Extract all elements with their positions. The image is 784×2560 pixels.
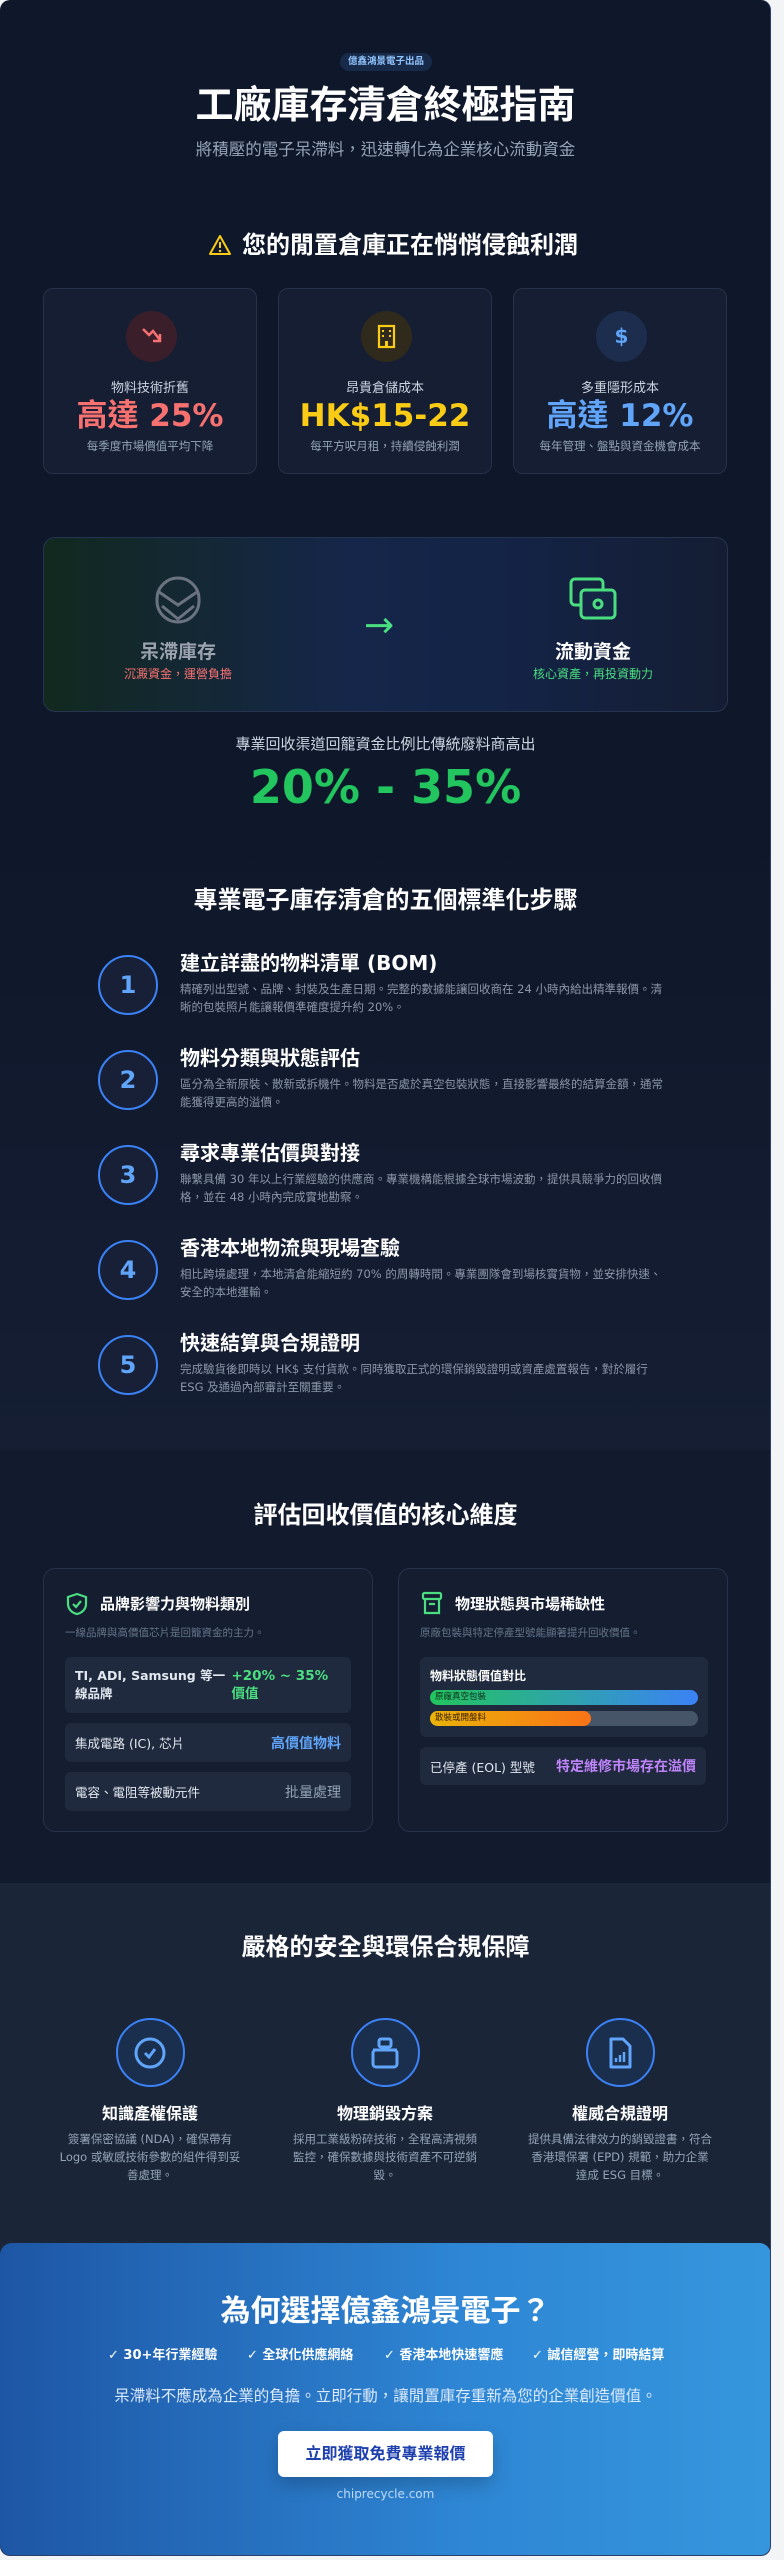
stat card: storage cost: 昂貴倉儲成本 <box>346 381 424 396</box>
step 2: 區分為全新原裝、散新或拆機件。物料是否處於真空包裝狀態，直接影響最終的結算金額，通常能獲得更高的溢價。 <box>180 1077 663 1109</box>
row: top brands: +20% ~ 35% 價值 <box>231 1668 328 1702</box>
transform panel <box>43 537 728 712</box>
steps section background <box>0 830 771 1450</box>
icon: cash <box>570 578 616 620</box>
stat callout: 專業回收渠道回籠資金比例比傳統廢料商高出 <box>235 735 536 753</box>
row: IC: 集成電路 (IC), 芯片 <box>75 1736 184 1751</box>
panel: physical state <box>398 1568 728 1832</box>
transform panel: 沉澱資金，運營負擔 <box>124 667 232 681</box>
compliance heading: 嚴格的安全與環保合規保障 <box>242 1933 530 1961</box>
row: IC: 高價值物料 <box>271 1736 341 1752</box>
step 4: 4 <box>120 1256 136 1284</box>
row: EOL: 已停產 (EOL) 型號 <box>430 1760 535 1774</box>
button: 立即獲取免費專業報價 <box>305 2444 466 2463</box>
row: EOL: 特定維修市場存在溢價 <box>556 1759 696 1775</box>
stat card: storage cost: HK$15-22 <box>300 398 470 434</box>
step 4: 香港本地物流與現場查驗 <box>180 1236 400 1260</box>
stat card: storage cost: 每平方呎月租，持續侵蝕利潤 <box>310 439 460 453</box>
bar chart: condition comparison <box>420 1657 708 1737</box>
step 5: 快速結算與合規證明 <box>180 1331 360 1355</box>
icon: check circle <box>116 2018 184 2087</box>
compliance: IP protection <box>60 2018 240 2182</box>
row: top brands: TI, ADI, Samsung 等一線品牌 <box>75 1668 225 1701</box>
panel: brand influence <box>43 1568 373 1832</box>
subtitle: 將積壓的電子呆滯料，迅速轉化為企業核心流動資金 <box>196 140 575 159</box>
warning heading: 您的閒置倉庫正在悄悄侵蝕利潤 <box>242 231 578 259</box>
compliance: certification: 提供具備法律效力的銷毀證書，符合香港環保署 (EPD) 規範，助力企業達成 ESG 目標。 <box>528 2132 712 2182</box>
icon: dollar: $ <box>615 324 628 348</box>
compliance: destruction: 物理銷毀方案 <box>337 2104 433 2123</box>
icon: stagnant box <box>156 576 200 624</box>
stat card: hidden cost: 高達 12% <box>546 398 694 434</box>
row: passive <box>65 1772 351 1811</box>
step 3: 聯繫具備 30 年以上行業經驗的供應商。專業機構能根據全球市場波動，提供具競爭力的回收價格，並在 48 小時內完成實地勘察。 <box>180 1172 662 1204</box>
tagline: 呆滯料不應成為企業的負擔。立即行動，讓閒置庫存重新為您的企業創造價值。 <box>114 2387 657 2405</box>
checklist: ✓ 香港本地快速響應 <box>384 2348 503 2363</box>
step 1 <box>98 951 662 1015</box>
stat card: hidden cost: 多重隱形成本 <box>581 381 659 396</box>
icon: archive <box>422 1592 442 1614</box>
stat card: depreciation <box>43 288 257 474</box>
step 2 <box>98 1046 663 1110</box>
step 1: 精確列出型號、品牌、封裝及生產日期。完整的數據能讓回收商在 24 小時內給出精準報價。清晰的包裝照片能讓報價準確度提升約 20%。 <box>180 982 662 1014</box>
arrow: → <box>364 605 394 646</box>
icon: building <box>361 311 412 362</box>
checklist: ✓ 全球化供應網絡 <box>247 2348 353 2363</box>
icon: warning <box>209 235 231 255</box>
step 1: 1 <box>120 971 136 999</box>
steps heading: 專業電子庫存清倉的五個標準化步驟 <box>194 886 578 914</box>
CTA title: 為何選擇億鑫鴻景電子？ <box>220 2294 550 2329</box>
icon: trend down <box>126 311 177 362</box>
title: 工廠庫存清倉終極指南 <box>195 83 576 127</box>
checklist <box>108 2348 664 2363</box>
stat callout <box>235 735 536 814</box>
icon: shredder <box>350 2018 420 2087</box>
panel: brand influence: 品牌影響力與物料類別 <box>100 1595 250 1613</box>
panel: physical state: 物理狀態與市場稀缺性 <box>455 1595 605 1613</box>
step 3: 尋求專業估價與對接 <box>180 1141 360 1165</box>
checklist: ✓ 誠信經營，即時結算 <box>532 2348 664 2363</box>
stat card: depreciation: 物料技術折舊 <box>111 381 189 396</box>
step 5: 5 <box>120 1351 136 1379</box>
step 3 <box>98 1141 662 1205</box>
url: chiprecycle.com <box>337 2487 434 2501</box>
row: IC <box>65 1723 351 1762</box>
button <box>278 2431 493 2477</box>
step 4 <box>98 1236 661 1300</box>
compliance: certification <box>528 2018 712 2182</box>
transform panel: 核心資產，再投資動力 <box>533 667 653 681</box>
label: stagnant inventory: 呆滯庫存 <box>140 641 216 663</box>
row: EOL <box>420 1747 706 1785</box>
CTA panel <box>0 2243 771 2556</box>
stat card: depreciation: 高達 25% <box>76 398 224 434</box>
bar chart: condition comparison: 物料狀態價值對比 <box>430 1669 526 1683</box>
badge: 億鑫鴻景電子出品 <box>348 56 424 67</box>
row: passive: 批量處理 <box>285 1784 341 1800</box>
step 3: 3 <box>120 1161 136 1189</box>
row: top brands <box>65 1657 351 1713</box>
badge <box>340 53 432 71</box>
compliance: certification: 權威合規證明 <box>572 2104 668 2123</box>
bar chart: condition comparison: 原廠真空包裝 <box>435 1692 486 1702</box>
checklist: ✓ 30+年行業經驗 <box>108 2348 217 2363</box>
values section background <box>0 1450 771 1883</box>
step 5 <box>98 1331 648 1395</box>
panel: physical state: 原廠包裝與特定停產型號能顯著提升回收價值。 <box>420 1627 640 1639</box>
stat card: hidden cost <box>513 288 727 474</box>
step 5: 完成驗貨後即時以 HK$ 支付貨款。同時獲取正式的環保銷毀證明或資產處置報告，對於履行 ESG 及通過內部審計至關重要。 <box>180 1362 648 1394</box>
step 4: 相比跨境處理，本地清倉能縮短約 70% 的周轉時間。專業團隊會到場核實貨物，並安排快速、安全的本地運輸。 <box>180 1267 661 1299</box>
icon: dollar <box>596 311 647 362</box>
stat callout: 20% - 35% <box>250 760 521 814</box>
icon: report <box>586 2018 654 2087</box>
step 2: 2 <box>120 1066 136 1094</box>
compliance: IP protection: 知識產權保護 <box>102 2104 198 2123</box>
step 1: 建立詳盡的物料清單 (BOM) <box>180 951 437 975</box>
stat card: storage cost <box>278 288 492 474</box>
panel: brand influence: 一線品牌與高價值芯片是回籠資金的主力。 <box>65 1627 264 1639</box>
stat card: depreciation: 每季度市場價值平均下降 <box>87 439 213 453</box>
compliance: IP protection: 簽署保密協議 (NDA)，確保帶有 Logo 或敏感技術參數的組件得到妥善處理。 <box>60 2132 240 2182</box>
icon: shield <box>66 1592 88 1616</box>
compliance: destruction: 採用工業級粉碎技術，全程高清視頻監控，確保數據與技術資產不可逆銷毀。 <box>293 2132 477 2182</box>
step 2: 物料分類與狀態評估 <box>180 1046 360 1070</box>
stat card: hidden cost: 每年管理、盤點與資金機會成本 <box>540 439 700 453</box>
bar chart: condition comparison: 散裝或開盤料 <box>435 1713 486 1723</box>
label: liquid cash: 流動資金 <box>555 641 631 663</box>
row: passive: 電容、電阻等被動元件 <box>75 1785 200 1800</box>
compliance section background <box>0 1883 771 2263</box>
compliance: destruction <box>293 2018 477 2182</box>
values heading: 評估回收價值的核心維度 <box>254 1501 518 1529</box>
